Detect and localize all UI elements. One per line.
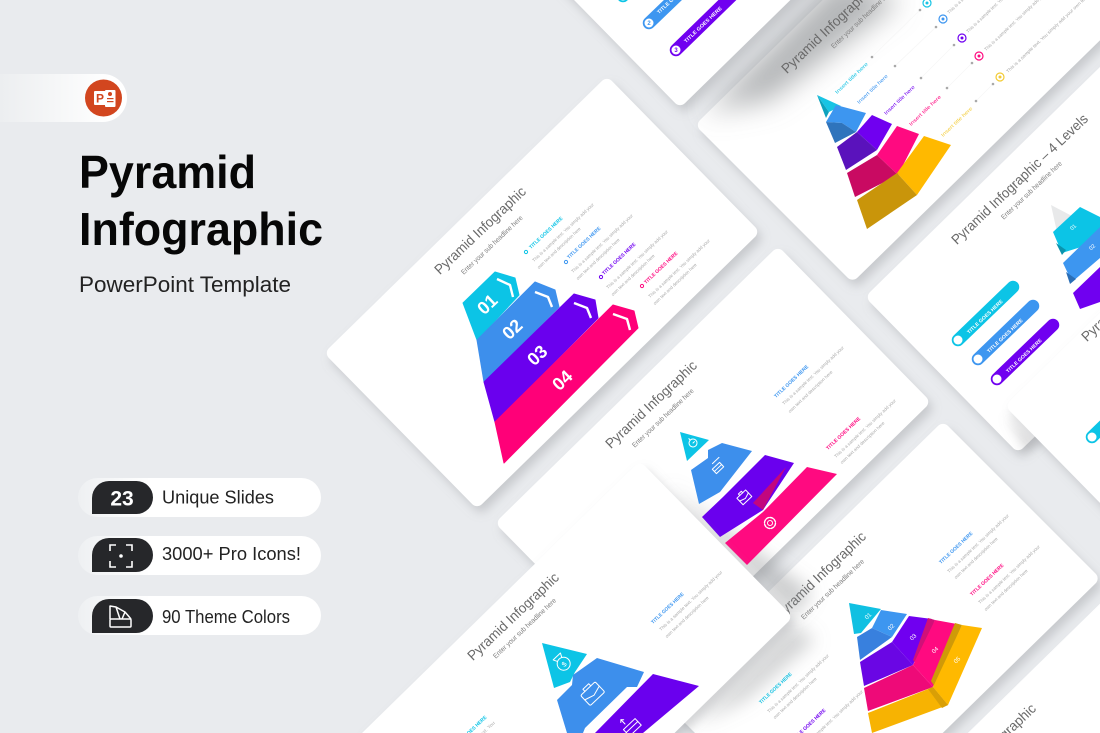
- slide card: main numbered pyramid: [324, 76, 760, 509]
- slide card: far right: [1005, 129, 1100, 562]
- icon: timer: [686, 436, 699, 449]
- text block: blue title: own text and description here: [953, 536, 999, 580]
- text block: pink title: own text and description here: [983, 568, 1029, 612]
- title pills: TITLE GOES HERE: [966, 298, 1005, 336]
- text block: blue title: TITLE GOES HERE: [773, 364, 811, 400]
- text block: pink title: This is a sample text. You simply add your: [977, 544, 1041, 605]
- timeline labels: Insert title here: [834, 61, 870, 96]
- timeline dots and connectors: [871, 0, 1004, 102]
- main title: Pyramid: [79, 146, 256, 198]
- title pills: 2: [647, 21, 651, 27]
- text block: pink title: This is a sample text. You simply add your: [833, 398, 897, 459]
- top ribbon with PowerPoint badge: [0, 74, 127, 122]
- timeline labels: [834, 61, 974, 139]
- lower front pyramid: [542, 643, 699, 733]
- slide subtitle: zigzag pyramid: Enter your sub headline here: [631, 388, 696, 449]
- feature pill: unique slides: Unique Slides: [162, 486, 274, 508]
- slide title: 4 levels: Pyramid Infographic – 4 Levels: [948, 111, 1091, 247]
- icon: money bag: $: [561, 661, 569, 669]
- slide subtitle: numbered 3D pyramid: Enter your sub headline here: [800, 558, 866, 621]
- soft shadow onto 4 levels card: [1006, 416, 1040, 452]
- numbered 3D pyramid: 03: [909, 633, 919, 642]
- text block: blue title: This is a sample text. You simply add your: [946, 513, 1010, 574]
- 3D pyramid: [817, 95, 951, 229]
- title pills: TITLE GOES HERE: [1005, 337, 1044, 375]
- soft shadow from front card: [665, 485, 812, 617]
- slide card: top pills: [527, 0, 963, 108]
- timeline labels: Insert title here: [883, 84, 917, 117]
- title pills: [954, 287, 1053, 384]
- main numbered pyramid: 02: [498, 315, 526, 344]
- subtitle: PowerPoint Template: [79, 272, 291, 297]
- slide subtitle: 4 levels: Enter your sub headline here: [1000, 160, 1064, 221]
- text block 4: own text and description here: [652, 262, 698, 306]
- text block 1: TITLE GOES HERE: [528, 215, 565, 251]
- text block: blue title: This is a sample text. You simply add your: [658, 569, 724, 632]
- slide subtitle: lower front: Enter your sub headline here: [492, 597, 558, 660]
- feature pill: unique slides: 23: [110, 488, 134, 510]
- icon: briefcase: [579, 680, 605, 706]
- text block: blue title: TITLE GOES HERE: [650, 591, 686, 626]
- text block 2: own text and description here: [575, 237, 621, 281]
- icon: gear: [762, 515, 778, 531]
- title pills: [618, 0, 750, 54]
- text block: blue title: own text and description here: [787, 369, 834, 414]
- title pills: 3: [674, 48, 678, 54]
- slide card: 3D pyramid with timeline: [695, 0, 1100, 282]
- pyramid: ribbon levels: 02: [1088, 243, 1097, 252]
- slide title: zigzag pyramid: Pyramid Infographic: [602, 357, 700, 451]
- level 03: [484, 294, 598, 422]
- numbered 3D pyramid: 04: [931, 646, 941, 655]
- slide card: lower front pyramid: [357, 461, 793, 733]
- icon: focus frame: [110, 545, 132, 567]
- title pills: TITLE GOES HERE: [683, 5, 724, 45]
- timeline labels: Insert title here: [908, 94, 943, 128]
- timeline labels: Insert title here: [940, 106, 974, 139]
- slide title: lower front: Pyramid Infographic: [464, 569, 562, 663]
- text block 1: This is a sample text. You simply add your: [531, 202, 595, 263]
- feature pill: theme colors: 90 Theme Colors: [162, 606, 290, 627]
- text block 3: This is a sample text. You simply add your: [605, 229, 669, 290]
- title pills: TITLE GOES HERE: [986, 317, 1025, 355]
- text block 1: own text and description here: [536, 226, 582, 270]
- slide card: zigzag pyramid: [495, 246, 931, 679]
- numbered 3D pyramid: [849, 603, 982, 733]
- icon: money bag: [552, 652, 573, 673]
- text block 4: This is a sample text. You simply add your: [647, 238, 711, 299]
- pyramid: ribbon levels: [1051, 205, 1100, 309]
- slide title: main: Pyramid Infographic: [431, 183, 529, 277]
- level 01: [463, 272, 519, 340]
- feature pill: unique slides: [78, 478, 321, 517]
- feature pill: theme colors: [78, 596, 321, 635]
- level 02: [477, 282, 559, 382]
- main title: [79, 146, 323, 255]
- level 04: [495, 305, 638, 463]
- text block 4: TITLE GOES HERE: [643, 250, 680, 286]
- slide card: bottom right corner: [930, 493, 1100, 733]
- pyramid: ribbon levels: 01: [1069, 223, 1078, 232]
- icon: growth cart: [710, 457, 726, 474]
- text block 3: own text and description here: [610, 253, 656, 297]
- text block: pink title: TITLE GOES HERE: [969, 562, 1006, 598]
- timeline descriptions: [946, 0, 1089, 74]
- text block: pink title: own text and description here: [839, 420, 886, 465]
- timeline labels: Insert title here: [856, 73, 890, 106]
- text block: blue title: own text and description here: [664, 595, 710, 639]
- soft shadow from top card: [705, 0, 900, 112]
- numbered 3D pyramid: 05: [953, 656, 963, 665]
- main numbered pyramid: 03: [523, 341, 551, 370]
- feature pill: pro icons: [78, 536, 321, 575]
- feature pill: pro icons: 3000+ Pro Icons!: [162, 543, 301, 564]
- text block: blue title: This is a sample text. You simply add your: [781, 345, 845, 406]
- slide subtitle: main: Enter your sub headline here: [460, 215, 525, 276]
- numbered 3D pyramid: 02: [887, 623, 897, 632]
- main numbered pyramid: 01: [473, 290, 501, 319]
- text block 2: TITLE GOES HERE: [566, 225, 603, 261]
- timeline descriptions: This is a sample text. You simply add your own text: [1005, 0, 1089, 74]
- main numbered pyramid: [463, 272, 638, 463]
- main title: Infographic: [79, 203, 323, 255]
- text block: blue title: TITLE GOES HERE: [938, 530, 975, 566]
- numbered 3D pyramid: 01: [864, 612, 874, 621]
- zigzag pyramid: [680, 432, 837, 565]
- main numbered pyramid: 04: [548, 366, 576, 395]
- icon: PowerPoint logo: P: [96, 92, 104, 106]
- text block: cyan title: This is a sample text. You simply add your: [766, 653, 830, 714]
- icon: chart cart: [617, 712, 641, 733]
- text block: pink title: TITLE GOES HERE: [825, 416, 863, 452]
- slide card: 4 levels: [865, 20, 1100, 453]
- icon: briefcase: [736, 489, 752, 505]
- slide title: numbered 3D pyramid: Pyramid Infographic: [771, 528, 869, 622]
- text block 3: TITLE GOES HERE: [601, 241, 638, 277]
- pill: far right: [1088, 400, 1100, 442]
- text block 2: This is a sample text. You simply add your: [570, 213, 634, 274]
- soft shadow of front card on numbered card: [695, 625, 815, 725]
- icon: color swatch fan: [110, 606, 131, 627]
- text block: cyan title: own text and description here: [772, 676, 818, 720]
- text block: cyan title: TITLE GOES HERE: [758, 671, 794, 706]
- slide card: numbered 3D pyramid: [660, 421, 1100, 733]
